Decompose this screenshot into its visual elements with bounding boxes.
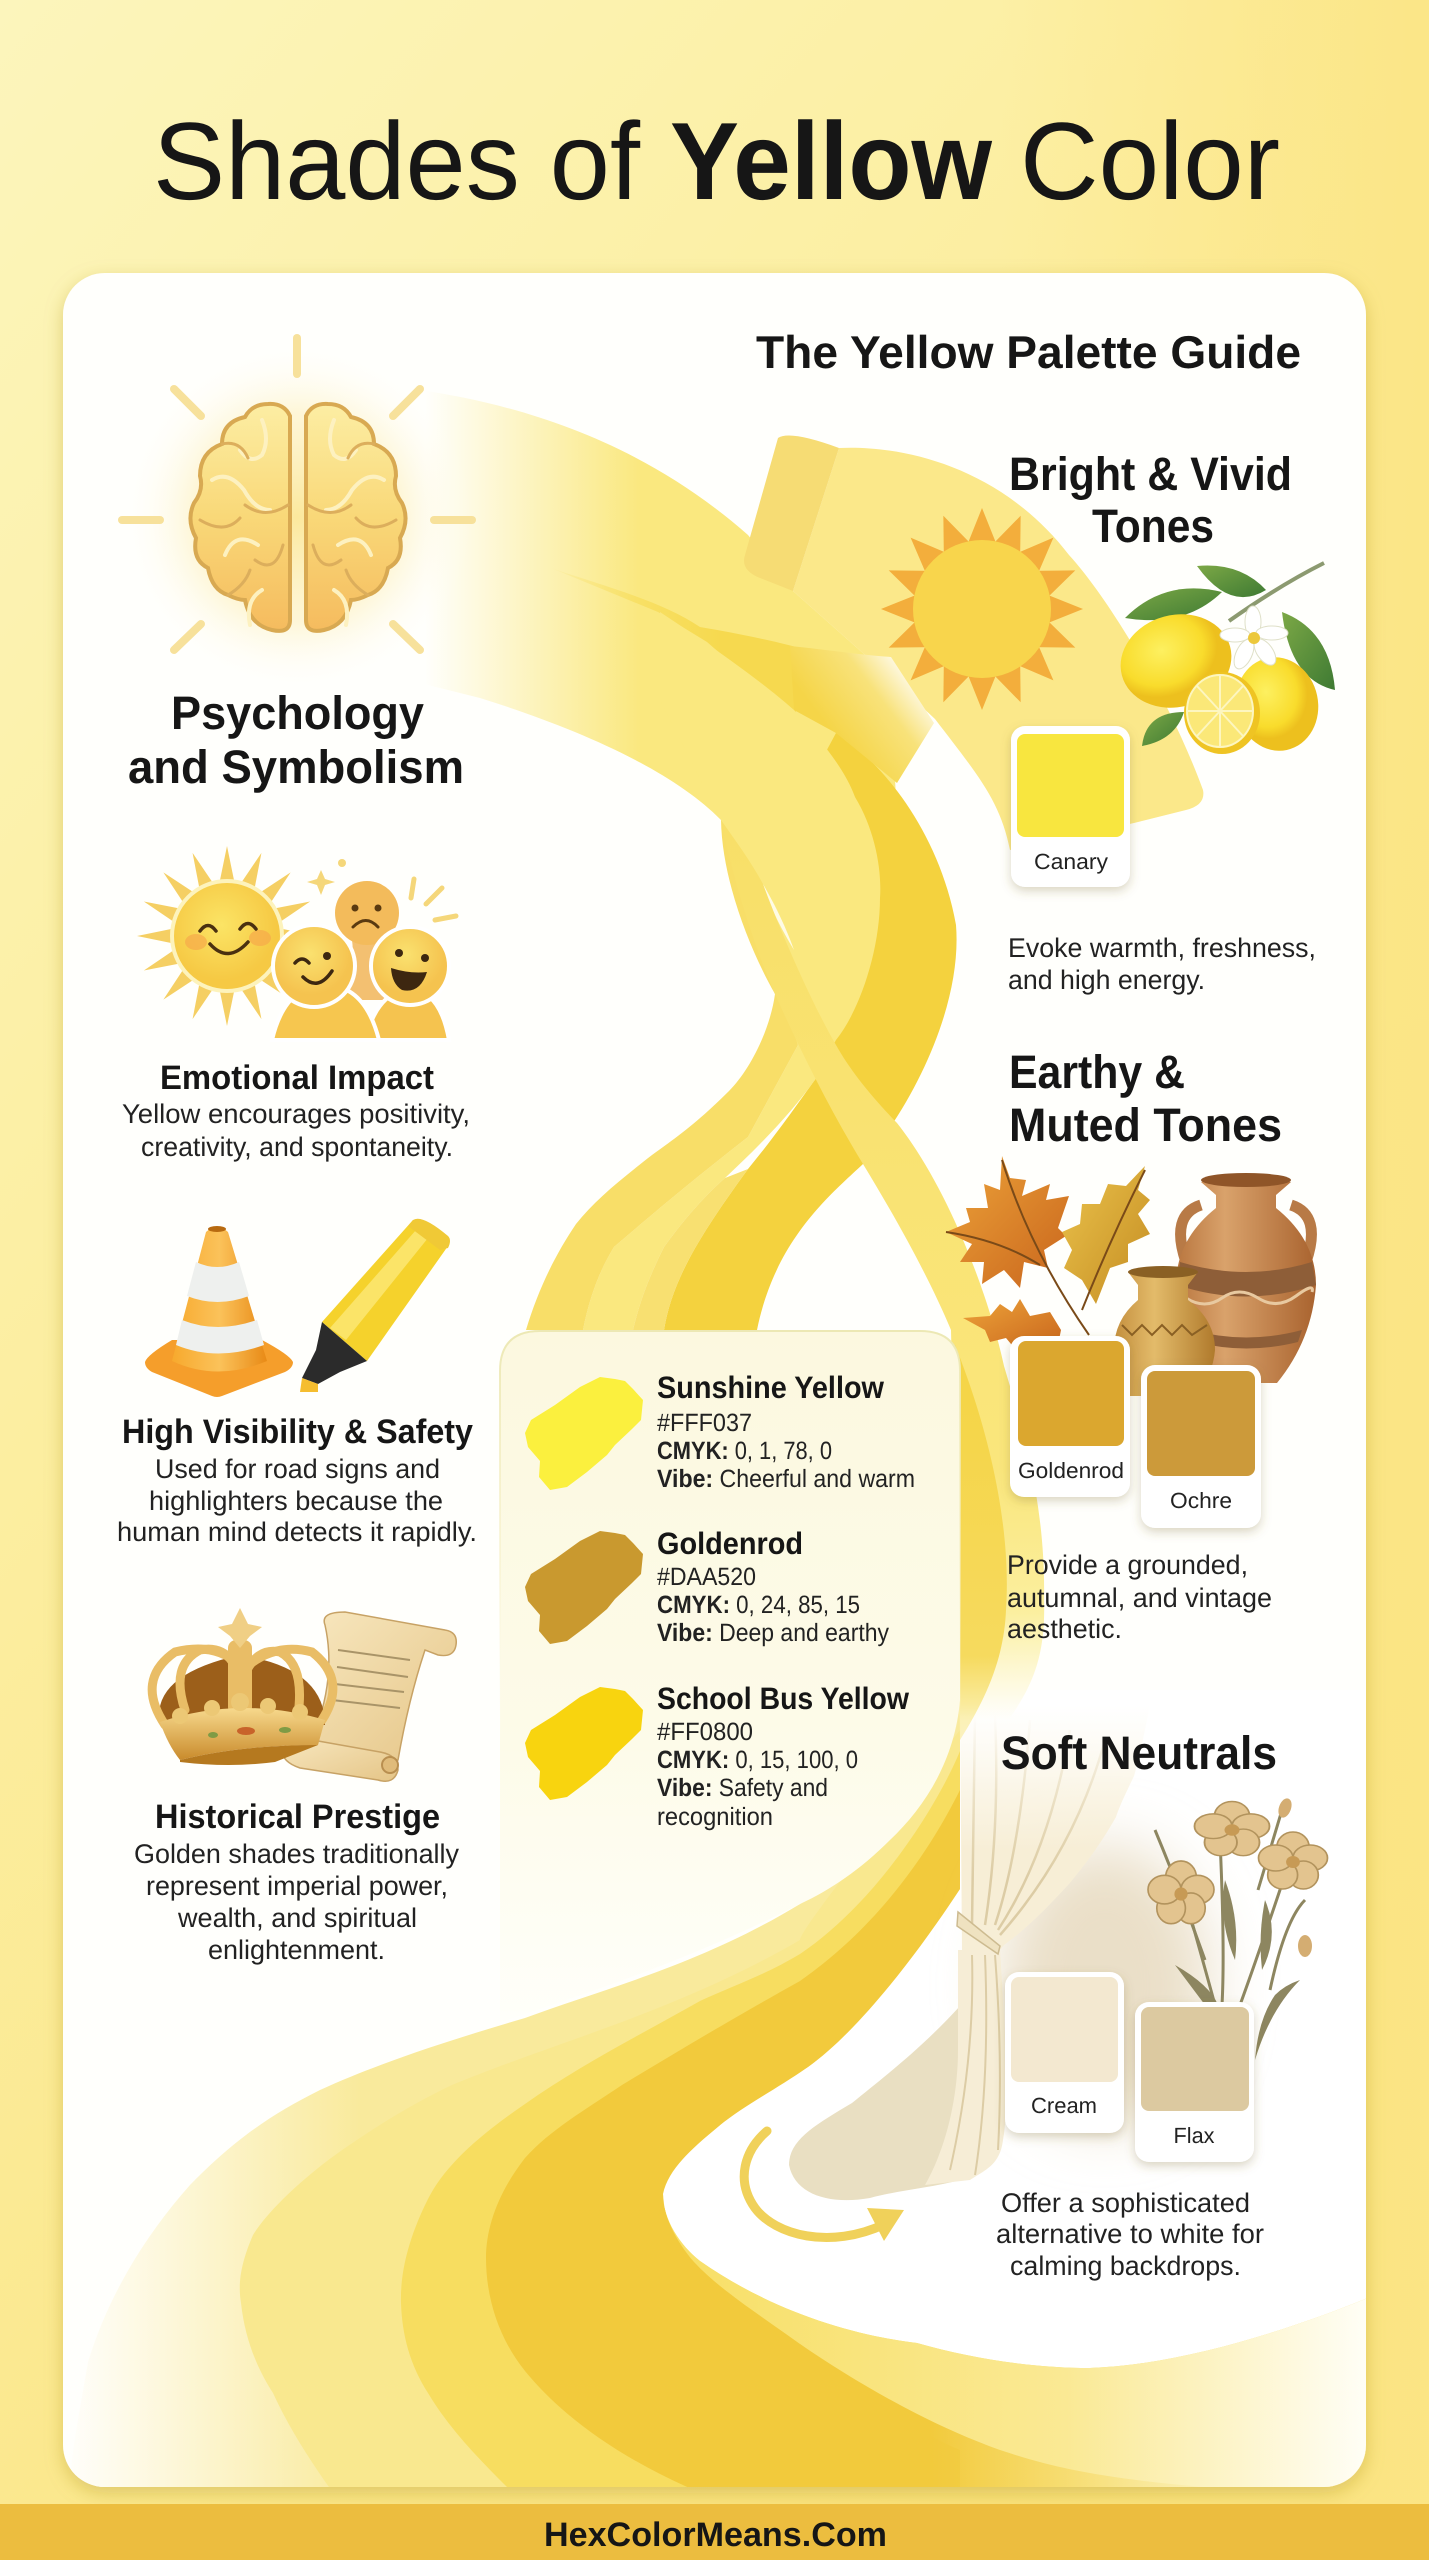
heading: earthy and muted tones: Earthy & bbox=[1009, 1045, 1185, 1098]
text: emotional impact: Yellow encourages positivity, bbox=[122, 1099, 470, 1129]
heading: bright and vivid tones: Bright & Vivid bbox=[1009, 447, 1292, 500]
heading: bright and vivid tones: Tones bbox=[1092, 499, 1214, 552]
text: provide a grounded: Provide a grounded, bbox=[1007, 1550, 1248, 1580]
swatch card: canary bbox=[1011, 726, 1130, 887]
text: school bus yellow: #FF0800 bbox=[657, 1718, 753, 1746]
icon: scroll bbox=[282, 1612, 456, 1781]
title: Color bbox=[1020, 100, 1280, 223]
text: sunshine yellow bbox=[657, 1370, 915, 1493]
sparkles bbox=[307, 870, 335, 895]
text: evoke warmth: and high energy. bbox=[1008, 965, 1205, 995]
text: offer a sophisticated bbox=[996, 2188, 1264, 2281]
text: school bus yellow: Vibe: Safety and bbox=[657, 1774, 828, 1802]
left darker strand bbox=[526, 820, 798, 1330]
heading: earthy and muted tones: Muted Tones bbox=[1009, 1098, 1282, 1151]
text: historical prestige: Golden shades traditionally bbox=[134, 1839, 459, 1869]
text: historical prestige: enlightenment. bbox=[208, 1935, 385, 1965]
text: sunshine yellow: Sunshine Yellow bbox=[657, 1370, 885, 1405]
swatch card: goldenrod: Goldenrod bbox=[1018, 1458, 1124, 1483]
text: high visibility and safety: highlighters because the bbox=[149, 1486, 443, 1516]
title: Shades of bbox=[153, 100, 640, 223]
footer bar: HexColorMeans.Com bbox=[544, 2516, 887, 2554]
text: school bus yellow: School Bus Yellow bbox=[657, 1681, 910, 1716]
text: historical prestige: represent imperial power, bbox=[146, 1871, 448, 1901]
swatch card: ochre bbox=[1141, 1365, 1261, 1528]
text: school bus yellow: recognition bbox=[657, 1803, 773, 1831]
swatch card: goldenrod bbox=[1010, 1336, 1130, 1497]
swatch: goldenrod bbox=[525, 1531, 643, 1644]
text: goldenrod bbox=[657, 1526, 889, 1647]
swatch card: cream bbox=[1005, 1972, 1124, 2133]
text: evoke warmth bbox=[1008, 933, 1316, 995]
swatch card: ochre: Ochre bbox=[1170, 1488, 1232, 1513]
text: emotional impact bbox=[122, 1059, 470, 1162]
text: goldenrod: Goldenrod bbox=[657, 1526, 803, 1561]
text: emotional impact: creativity, and spontaneity. bbox=[141, 1132, 453, 1162]
backdrop behind neutrals bbox=[1000, 1845, 1210, 2125]
icon: small clay jar bbox=[1114, 1266, 1215, 1396]
crossing strand bbox=[721, 820, 1044, 1725]
text: provide a grounded: aesthetic. bbox=[1007, 1614, 1122, 1644]
pale strand bbox=[583, 612, 880, 1330]
swatch: sunshine yellow bbox=[525, 1377, 643, 1490]
icon: autumn leaves bbox=[946, 1156, 1150, 1350]
main white panel bbox=[63, 273, 1366, 2487]
heading: psychology and symbolism: Psychology bbox=[171, 686, 424, 739]
text: high visibility and safety: human mind detects it rapidly. bbox=[117, 1517, 477, 1547]
text: provide a grounded bbox=[1007, 1550, 1272, 1644]
winking person left bbox=[272, 985, 379, 1040]
icon: lemons and leaves bbox=[1110, 563, 1335, 758]
ribbon tab bbox=[744, 436, 839, 591]
swatch card: flax: Flax bbox=[1174, 2123, 1214, 2148]
icon: crown bbox=[152, 1608, 333, 1765]
heading: earthy and muted tones bbox=[1009, 1045, 1282, 1151]
text: high visibility and safety: High Visibility & Safety bbox=[122, 1413, 473, 1451]
sad face bbox=[345, 940, 395, 1000]
icon: traffic cone bbox=[145, 1226, 293, 1397]
text: sunshine yellow: CMYK: 0, 1, 78, 0 bbox=[657, 1437, 832, 1465]
text: provide a grounded: autumnal, and vintage bbox=[1007, 1583, 1272, 1613]
icon: glowing brain bbox=[122, 338, 472, 692]
icon: big clay jar bbox=[1176, 1173, 1316, 1383]
panel card bbox=[500, 1331, 960, 2022]
icon: beige flowing shape bbox=[789, 2006, 960, 2200]
text: emotional impact: Emotional Impact bbox=[160, 1059, 434, 1097]
icon: beige flowers bbox=[1148, 1797, 1328, 2060]
sun bbox=[137, 846, 317, 1026]
text: historical prestige bbox=[134, 1798, 459, 1965]
title: Yellow bbox=[670, 100, 992, 223]
swatch: school bus yellow bbox=[525, 1687, 643, 1800]
text: goldenrod: Vibe: Deep and earthy bbox=[657, 1619, 889, 1647]
text: historical prestige: Historical Prestige bbox=[155, 1798, 440, 1836]
text: school bus yellow bbox=[657, 1681, 910, 1831]
text: goldenrod: #DAA520 bbox=[657, 1563, 756, 1591]
text: school bus yellow: CMYK: 0, 15, 100, 0 bbox=[657, 1746, 858, 1774]
icon: sun with faces bbox=[137, 846, 456, 1040]
heading: bright and vivid tones bbox=[1009, 447, 1292, 552]
text: evoke warmth: Evoke warmth, freshness, bbox=[1008, 933, 1316, 963]
icon: curtain bbox=[925, 1705, 1150, 2185]
text: high visibility and safety bbox=[117, 1413, 477, 1547]
text: sunshine yellow: Vibe: Cheerful and warm bbox=[657, 1465, 915, 1493]
gold strand bbox=[664, 733, 957, 1330]
text: offer a sophisticated: Offer a sophisticated bbox=[1001, 2188, 1250, 2218]
swatch card: flax bbox=[1135, 2002, 1254, 2162]
text: sunshine yellow: #FFF037 bbox=[657, 1409, 752, 1437]
heading: psychology and symbolism bbox=[128, 686, 464, 793]
heading: the yellow palette guide: The Yellow Palette Guide bbox=[756, 326, 1301, 378]
icon: curved arrow bbox=[744, 2131, 904, 2241]
text: high visibility and safety: Used for road signs and bbox=[155, 1454, 440, 1484]
icon: highlighter bbox=[300, 1219, 450, 1392]
footer bar bbox=[0, 2504, 1429, 2560]
icon: sun bbox=[881, 508, 1083, 710]
text: offer a sophisticated: alternative to white for bbox=[996, 2219, 1264, 2249]
upper pale band from the brain bbox=[439, 394, 896, 820]
text: goldenrod: CMYK: 0, 24, 85, 15 bbox=[657, 1591, 860, 1619]
heading: soft neutrals: Soft Neutrals bbox=[1001, 1726, 1277, 1779]
info panel: three yellow shades bbox=[500, 1331, 960, 2022]
palette plate behind the sun bbox=[793, 448, 1203, 850]
light sliver bbox=[763, 884, 794, 950]
smiling person right bbox=[365, 990, 449, 1040]
flowing yellow ribbons bbox=[69, 390, 1370, 2490]
swatch card: canary: Canary bbox=[1034, 849, 1108, 874]
text: offer a sophisticated: calming backdrops. bbox=[1010, 2251, 1241, 2281]
swatch card: cream: Cream bbox=[1031, 2093, 1097, 2118]
heading: psychology and symbolism: and Symbolism bbox=[128, 740, 464, 793]
text: historical prestige: wealth, and spiritual bbox=[177, 1903, 417, 1933]
